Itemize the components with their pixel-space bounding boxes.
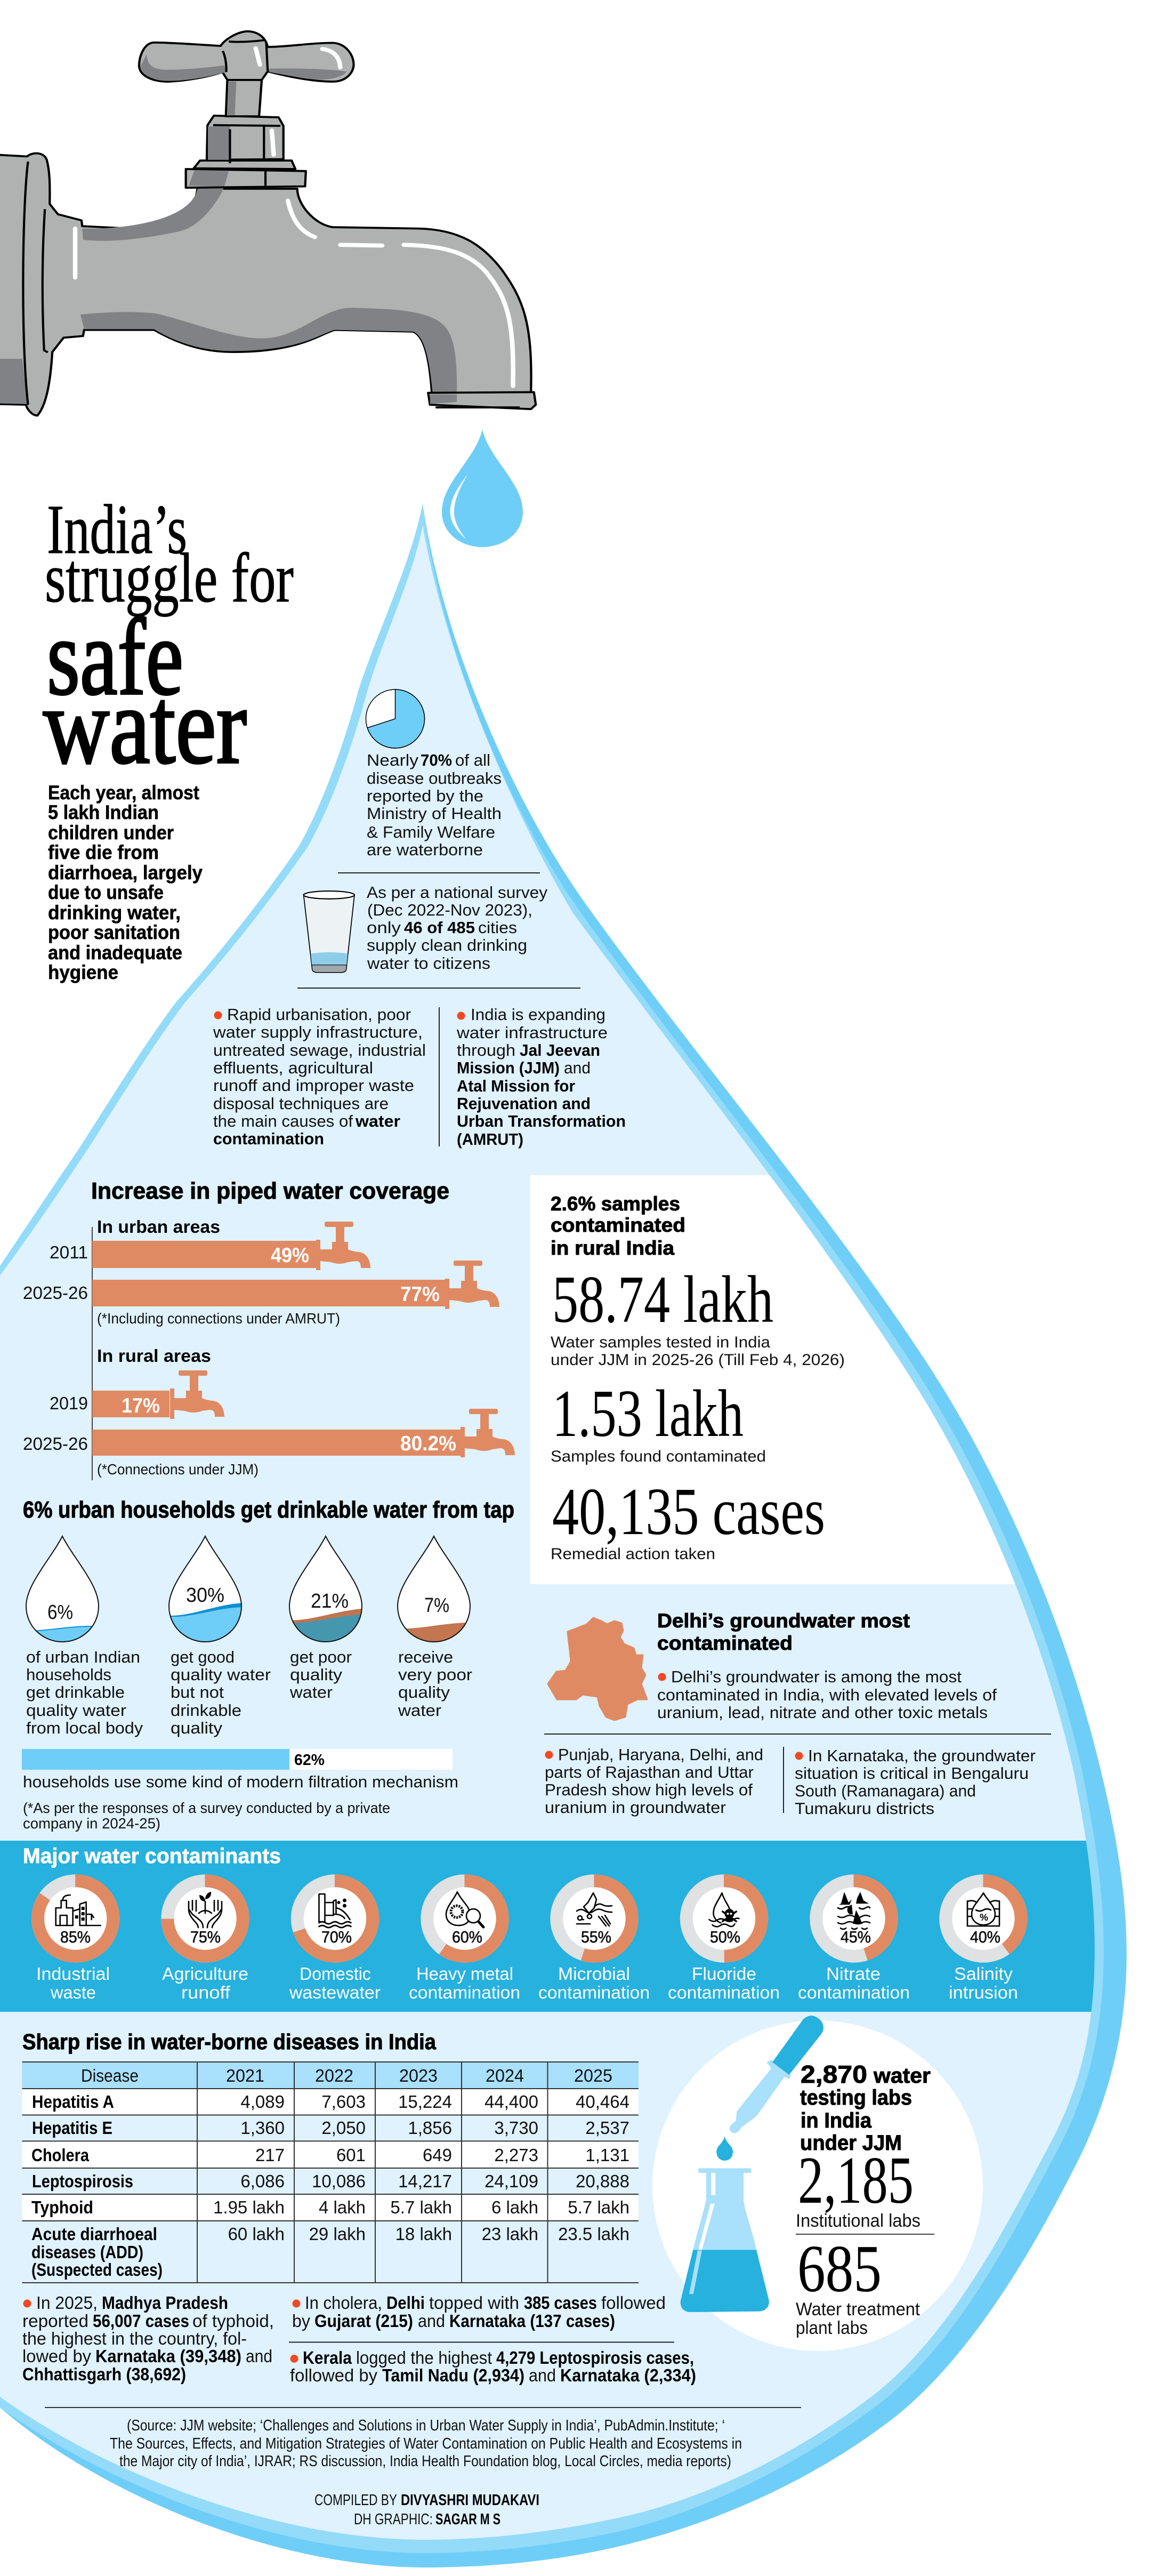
panel: water testing labs: 2,870 bbox=[801, 2060, 867, 2088]
panel: water testing labs: testing labs bbox=[800, 2086, 912, 2109]
table values: 6,086 bbox=[240, 2171, 285, 2191]
donut: nitrate contamination 45 percent bbox=[798, 1881, 910, 2002]
drop captions: get drinkable bbox=[26, 1683, 125, 1702]
text: infrastructure missions: and bbox=[564, 1058, 591, 1077]
panel: Delhi groundwater: Delhi’s groundwater is among the most bbox=[671, 1667, 962, 1686]
panel: Delhi groundwater: Delhi’s groundwater most bbox=[657, 1610, 910, 1632]
source note: (Source: JJM website; ‘Challenges and Solutions in Urban Water Supply in India’, PubAdmin.Institute; ‘ bbox=[127, 2417, 725, 2434]
bar: 62 percent filtration bbox=[22, 1749, 458, 1791]
drop captions: quality water bbox=[171, 1665, 271, 1684]
donut: heavy metal contamination 60 percent: 60% bbox=[452, 1928, 482, 1946]
text: infrastructure missions: water infrastructure bbox=[456, 1023, 608, 1042]
table row labels: Hepatitis A bbox=[32, 2092, 114, 2112]
drop captions: get poor bbox=[290, 1648, 352, 1666]
donut: nitrate contamination 45 percent: Nitrate bbox=[826, 1964, 881, 1984]
text: national survey: water to citizens bbox=[367, 954, 490, 973]
panel: rural samples contaminated: 58.74 lakh bbox=[552, 1263, 773, 1337]
table values: 5.7 lakh bbox=[390, 2197, 452, 2217]
table header: 2025 bbox=[574, 2066, 612, 2085]
table values: 217 bbox=[255, 2145, 285, 2165]
text: causes of contamination: disposal techniques are bbox=[213, 1094, 389, 1113]
panel: water testing labs: 2,185 bbox=[798, 2144, 914, 2218]
intro text block: due to unsafe bbox=[48, 881, 164, 903]
donut: microbial contamination 55 percent: Microbial bbox=[558, 1964, 630, 1984]
bar: urban 2025-26: 77% bbox=[400, 1283, 440, 1306]
panel: Delhi groundwater: Pradesh show high levels of bbox=[545, 1780, 753, 1799]
panel: rural samples contaminated: Water samples tested in India bbox=[551, 1334, 770, 1351]
donut: fluoride contamination 50 percent: Fluoride bbox=[692, 1964, 756, 1984]
text: disease outbreaks: disease outbreaks bbox=[367, 769, 502, 788]
table values: 6 lakh bbox=[491, 2197, 538, 2217]
text: cholera note: 385 cases bbox=[524, 2293, 597, 2313]
table values: 1,131 bbox=[585, 2145, 629, 2165]
panel: piped water coverage bbox=[23, 1178, 515, 1480]
credits: COMPILED BY bbox=[314, 2492, 397, 2509]
text: causes of contamination: Rapid urbanisation, poor bbox=[227, 1005, 411, 1024]
large water drop background bbox=[0, 504, 1127, 2567]
table values: 14,217 bbox=[398, 2171, 452, 2191]
title: India’s bbox=[47, 490, 187, 568]
panel: major water contaminants: Major water contaminants bbox=[23, 1844, 281, 1868]
table values: 2,273 bbox=[494, 2145, 538, 2165]
icon: water tap bbox=[0, 31, 536, 415]
bar: urban 2011: 49% bbox=[271, 1244, 309, 1267]
donut: agriculture runoff 75 percent bbox=[162, 1881, 248, 2002]
bar: urban 2011 bbox=[50, 1222, 370, 1270]
panel: Delhi groundwater: uranium, lead, nitrate and other toxic metals bbox=[657, 1703, 988, 1722]
text: causes of contamination: contamination bbox=[213, 1129, 324, 1148]
table values: 15,224 bbox=[398, 2092, 452, 2112]
bar: rural 2025-26 bbox=[23, 1409, 515, 1457]
panel: rural samples contaminated: Remedial action taken bbox=[551, 1545, 715, 1563]
table values: 2,537 bbox=[585, 2118, 629, 2138]
drop captions bbox=[26, 1648, 472, 1737]
table values: 60 lakh bbox=[228, 2224, 285, 2244]
donut: salinity intrusion 40 percent: intrusion bbox=[949, 1983, 1018, 2002]
donut: agriculture runoff 75 percent: runoff bbox=[181, 1983, 231, 2002]
donut: nitrate contamination 45 percent: contamination bbox=[798, 1983, 910, 2002]
icon: dropper and flask bbox=[681, 2016, 823, 2312]
table values: 40,464 bbox=[576, 2092, 629, 2112]
icon: glass of water bbox=[304, 891, 354, 973]
text: disease outbreaks bbox=[367, 751, 502, 859]
credits: SAGAR M S bbox=[435, 2511, 500, 2528]
drop captions: water bbox=[398, 1701, 441, 1720]
text: cholera note bbox=[292, 2293, 666, 2331]
drop captions: but not bbox=[171, 1683, 224, 1702]
footnote: survey bbox=[23, 1800, 390, 1832]
table values: 23.5 lakh bbox=[558, 2224, 629, 2244]
drop percentages: 7% bbox=[424, 1594, 449, 1617]
panel: Delhi groundwater: uranium in groundwater bbox=[545, 1798, 726, 1817]
intro text block: children under bbox=[48, 822, 174, 844]
drop percentages: 6% bbox=[47, 1601, 73, 1624]
intro text block: five die from bbox=[48, 841, 159, 863]
table row labels: Leptospirosis bbox=[32, 2171, 133, 2191]
text: national survey: only bbox=[367, 918, 401, 937]
panel: Delhi groundwater: Tumakuru districts bbox=[795, 1799, 934, 1818]
text: cholera note: followed bbox=[601, 2293, 666, 2313]
intro text block: drinking water, bbox=[48, 902, 181, 924]
credits: DH GRAPHIC: bbox=[354, 2511, 433, 2528]
source note: the Major city of India’, IJRAR; RS discussion, India Health Foundation blog, Local Circles, media reports) bbox=[119, 2453, 731, 2470]
text: disease outbreaks: 70% bbox=[421, 751, 452, 769]
donut: salinity intrusion 40 percent: 40% bbox=[970, 1928, 1000, 1946]
text: causes of contamination bbox=[213, 1005, 426, 1148]
panel: rural samples contaminated: Samples found contaminated bbox=[551, 1448, 766, 1465]
drop captions: water bbox=[289, 1683, 333, 1702]
text: disease outbreaks: Nearly bbox=[367, 751, 419, 769]
credits: DIVYASHRI MUDAKAVI bbox=[401, 2492, 539, 2509]
text: national survey: 46 of 485 bbox=[404, 918, 475, 937]
drop captions: quality bbox=[171, 1719, 223, 1737]
text: disease outbreaks: are waterborne bbox=[367, 840, 483, 859]
donut: domestic wastewater 70 percent: wastewater bbox=[289, 1983, 381, 2002]
text: infrastructure missions: Mission (JJM) bbox=[457, 1058, 560, 1077]
donut: salinity intrusion 40 percent: Salinity bbox=[954, 1964, 1013, 1984]
text: typhoid note: and bbox=[246, 2346, 272, 2366]
table row labels: Acute diarrhoeal bbox=[31, 2224, 157, 2244]
text: typhoid note: 56,007 cases bbox=[93, 2311, 189, 2331]
title bbox=[43, 490, 294, 787]
drop: 6 percent bbox=[20, 1536, 105, 1648]
panel: rural samples contaminated: contaminated bbox=[551, 1214, 685, 1236]
drop captions: get good bbox=[171, 1648, 235, 1666]
drop captions: receive bbox=[398, 1648, 453, 1666]
table values: 649 bbox=[423, 2145, 452, 2165]
text: causes of contamination: effluents, agricultural bbox=[213, 1058, 373, 1077]
panel: Delhi groundwater: In Karnataka, the groundwater bbox=[808, 1746, 1036, 1765]
table values: 1,856 bbox=[408, 2118, 452, 2138]
donut: heavy metal contamination 60 percent bbox=[409, 1881, 520, 2002]
panel: water testing labs: Water treatment bbox=[796, 2299, 920, 2320]
table values: 29 lakh bbox=[309, 2224, 366, 2244]
text: typhoid note: Madhya Pradesh bbox=[102, 2293, 228, 2313]
text: typhoid note: lowed by bbox=[22, 2346, 91, 2366]
donut: domestic wastewater 70 percent bbox=[289, 1881, 381, 2002]
donut: salinity intrusion 40 percent: % bbox=[980, 1912, 988, 1923]
icon: Delhi map bbox=[548, 1618, 647, 1720]
panel: Delhi groundwater: contaminated bbox=[657, 1632, 793, 1654]
source note: The Sources, Effects, and Mitigation Strategies of Water Contamination on Public Health and Ecosystems in bbox=[110, 2435, 742, 2452]
table header: 2023 bbox=[399, 2066, 438, 2085]
donut: nitrate contamination 45 percent: 45% bbox=[841, 1928, 871, 1946]
text: cholera note: by bbox=[292, 2311, 310, 2331]
title: safe bbox=[47, 597, 183, 718]
drop captions: quality bbox=[290, 1665, 343, 1684]
text: national survey: As per a national survey bbox=[367, 883, 548, 902]
text: disease outbreaks: of all bbox=[455, 751, 490, 769]
panel: major water contaminants bbox=[0, 1841, 1171, 2012]
drop captions: very poor bbox=[398, 1665, 472, 1684]
source note bbox=[110, 2417, 742, 2470]
text: leptospirosis note: and bbox=[529, 2365, 556, 2385]
drop percentages: 30% bbox=[186, 1584, 224, 1607]
text: infrastructure missions: through bbox=[457, 1041, 515, 1060]
table values: 2,050 bbox=[321, 2118, 366, 2138]
credits bbox=[314, 2492, 539, 2528]
text: cholera note: topped with bbox=[429, 2293, 519, 2313]
drop captions: drinkable bbox=[171, 1701, 241, 1720]
drop captions: of urban Indian bbox=[26, 1648, 140, 1666]
text: national survey: cities bbox=[478, 918, 517, 937]
table values: 1,360 bbox=[240, 2118, 285, 2138]
table values: 4,089 bbox=[240, 2092, 285, 2112]
table values: 3,730 bbox=[494, 2118, 538, 2138]
text: cholera note: and bbox=[418, 2311, 445, 2331]
table values: 44,400 bbox=[484, 2092, 538, 2112]
table values: 10,086 bbox=[312, 2171, 366, 2191]
donut: microbial contamination 55 percent: 55% bbox=[581, 1928, 611, 1946]
intro text block: and inadequate bbox=[48, 942, 182, 964]
text: causes of contamination: water bbox=[355, 1112, 400, 1130]
footnote: survey: company in 2024-25) bbox=[23, 1815, 160, 1832]
bar: rural 2025-26: 2025-26 bbox=[23, 1434, 88, 1454]
bar: rural 2019: 2019 bbox=[50, 1393, 88, 1413]
heading: water-borne diseases: Sharp rise in water-borne diseases in India bbox=[22, 2029, 437, 2054]
donut: domestic wastewater 70 percent: 70% bbox=[321, 1928, 352, 1946]
table values: 1.95 lakh bbox=[213, 2197, 285, 2217]
panel: water testing labs: under JJM bbox=[800, 2131, 902, 2155]
text: leptospirosis note: Karnataka (2,334) bbox=[560, 2365, 696, 2385]
text: typhoid note: the highest in the country, fol- bbox=[22, 2329, 247, 2348]
text: cholera note: Karnataka (137 cases) bbox=[449, 2311, 615, 2331]
table header bbox=[81, 2066, 612, 2085]
drop: 21 percent bbox=[283, 1536, 368, 1648]
text: leptospirosis note: Tamil Nadu (2,934) bbox=[382, 2365, 524, 2385]
text: national survey: (Dec 2022-Nov 2023), bbox=[367, 901, 532, 919]
text: infrastructure missions: Urban Transformation bbox=[457, 1112, 626, 1130]
panel: water testing labs bbox=[652, 2016, 983, 2351]
panel: Delhi groundwater: Punjab, Haryana, Delhi, and bbox=[558, 1745, 763, 1764]
table row labels: Cholera bbox=[31, 2145, 90, 2165]
table header: 2021 bbox=[226, 2066, 264, 2085]
donut: fluoride contamination 50 percent: contamination bbox=[668, 1983, 780, 2002]
table values: 601 bbox=[336, 2145, 366, 2165]
text: leptospirosis note bbox=[290, 2348, 696, 2385]
table values: 5.7 lakh bbox=[568, 2197, 629, 2217]
table values: 24,109 bbox=[484, 2171, 538, 2191]
table row labels: (Suspected cases) bbox=[31, 2260, 163, 2280]
panel: rural samples contaminated: under JJM in 2025-26 (Till Feb 4, 2026) bbox=[551, 1351, 845, 1369]
panel: water testing labs: Institutional labs bbox=[796, 2211, 920, 2231]
text: infrastructure missions: (AMRUT) bbox=[457, 1130, 523, 1149]
table row labels: Hepatitis E bbox=[32, 2118, 112, 2138]
icon: falling water drop bbox=[442, 429, 523, 547]
table row labels: diseases (ADD) bbox=[31, 2242, 143, 2262]
donut: agriculture runoff 75 percent: Agriculture bbox=[162, 1964, 248, 1984]
text: causes of contamination: runoff and improper waste bbox=[213, 1076, 414, 1095]
panel: Delhi groundwater: situation is critical in Bengaluru bbox=[795, 1764, 1029, 1783]
text: typhoid note: reported bbox=[22, 2311, 88, 2331]
panel: Delhi groundwater: contaminated in India, with elevated levels of bbox=[657, 1686, 997, 1704]
table: water-borne diseases bbox=[22, 2062, 639, 2283]
intro text block: Each year, almost bbox=[48, 782, 199, 804]
panel: urban households drinkable water: 6% urban households get drinkable water from tap bbox=[23, 1497, 514, 1523]
table row labels: Typhoid bbox=[31, 2197, 93, 2217]
donut: microbial contamination 55 percent: contamination bbox=[538, 1983, 650, 2002]
panel: urban households drinkable water bbox=[20, 1497, 514, 1832]
text: infrastructure missions bbox=[456, 1005, 626, 1149]
text: cholera note: Delhi bbox=[386, 2293, 425, 2313]
donut: microbial contamination 55 percent bbox=[538, 1881, 650, 2002]
table values: 23 lakh bbox=[482, 2224, 538, 2244]
table values: 20,888 bbox=[576, 2171, 629, 2191]
bar: urban 2025-26 bbox=[23, 1261, 499, 1309]
panel: rural samples contaminated: in rural India bbox=[551, 1237, 674, 1259]
panel: rural samples contaminated: 2.6% samples bbox=[551, 1193, 680, 1215]
text: infrastructure missions: India is expanding bbox=[471, 1005, 605, 1024]
panel: piped water coverage: In rural areas bbox=[97, 1346, 211, 1366]
panel: water testing labs: in India bbox=[801, 2109, 872, 2132]
text: national survey: supply clean drinking bbox=[367, 936, 527, 954]
bar: 62 percent filtration: 62% bbox=[294, 1752, 325, 1769]
panel: piped water coverage: In urban areas bbox=[97, 1217, 220, 1237]
text: national survey bbox=[367, 883, 548, 973]
drop percentages: 21% bbox=[311, 1590, 349, 1612]
drop captions: quality water bbox=[26, 1701, 126, 1720]
panel: rural samples contaminated bbox=[530, 1175, 1171, 1584]
panel: Delhi groundwater: South (Ramanagara) and bbox=[795, 1781, 976, 1800]
text: leptospirosis note: Kerala bbox=[303, 2348, 352, 2368]
donut: industrial waste 85 percent: Industrial bbox=[36, 1964, 110, 1984]
table values: 18 lakh bbox=[395, 2224, 452, 2244]
text: leptospirosis note: logged the highest bbox=[356, 2348, 492, 2368]
panel: piped water coverage: (*Connections under JJM) bbox=[97, 1461, 259, 1478]
text: leptospirosis note: 4,279 Leptospirosis cases, bbox=[496, 2348, 694, 2368]
text: infrastructure missions: Rejuvenation and bbox=[457, 1094, 591, 1113]
bar: rural 2025-26: 80.2% bbox=[400, 1432, 456, 1455]
text: typhoid note: Karnataka (39,348) bbox=[95, 2346, 241, 2366]
panel: piped water coverage: Increase in piped water coverage bbox=[91, 1178, 449, 1204]
text: causes of contamination: untreated sewage, industrial bbox=[213, 1041, 426, 1060]
bar: 62 percent filtration: households use some kind of modern filtration mechanism bbox=[23, 1772, 458, 1791]
text: leptospirosis note: followed by bbox=[290, 2365, 377, 2385]
donut: heavy metal contamination 60 percent: contamination bbox=[409, 1983, 520, 2002]
title: struggle for bbox=[45, 539, 294, 617]
text: disease outbreaks: Ministry of Health bbox=[367, 804, 502, 823]
text: typhoid note: In 2025, bbox=[36, 2293, 98, 2313]
table header: Disease bbox=[81, 2066, 139, 2085]
bar: urban 2011: 2011 bbox=[50, 1242, 88, 1262]
donut: salinity intrusion 40 percent bbox=[946, 1881, 1021, 2002]
panel: rural samples contaminated: 1.53 lakh bbox=[552, 1377, 744, 1451]
donut: heavy metal contamination 60 percent: Heavy metal bbox=[416, 1964, 513, 1984]
drop captions: households bbox=[26, 1665, 111, 1684]
panel: Delhi groundwater bbox=[544, 1610, 1051, 1818]
drop: 7 percent bbox=[391, 1536, 477, 1648]
intro text block: 5 lakh Indian bbox=[48, 801, 159, 823]
panel: water testing labs: water bbox=[873, 2064, 931, 2088]
panel: water testing labs: plant labs bbox=[796, 2318, 868, 2338]
text: infrastructure missions: Jal Jeevan bbox=[520, 1041, 600, 1060]
panel: rural samples contaminated: 40,135 cases bbox=[552, 1475, 825, 1549]
drop captions: quality bbox=[398, 1683, 450, 1702]
text: causes of contamination: water supply infrastructure, bbox=[213, 1023, 423, 1041]
intro text block: hygiene bbox=[48, 961, 118, 983]
text: cholera note: In cholera, bbox=[305, 2293, 382, 2313]
donut: industrial waste 85 percent bbox=[36, 1881, 113, 2002]
donut: fluoride contamination 50 percent bbox=[668, 1881, 780, 2002]
donut: industrial waste 85 percent: 85% bbox=[60, 1928, 91, 1946]
drop: 30 percent bbox=[163, 1536, 248, 1648]
bar: urban 2025-26: 2025-26 bbox=[23, 1283, 88, 1303]
title: water bbox=[43, 665, 247, 787]
table values: 4 lakh bbox=[319, 2197, 366, 2217]
text: cholera note: Gujarat (215) bbox=[314, 2311, 413, 2331]
donut: industrial waste 85 percent: waste bbox=[50, 1983, 96, 2002]
table header: 2024 bbox=[486, 2066, 524, 2085]
text: typhoid note: Chhattisgarh (38,692) bbox=[22, 2364, 186, 2384]
text: typhoid note bbox=[22, 2293, 274, 2384]
drop captions: from local body bbox=[26, 1719, 143, 1737]
donut: fluoride contamination 50 percent: 50% bbox=[710, 1928, 740, 1946]
text: disease outbreaks: reported by the bbox=[367, 787, 483, 805]
text: disease outbreaks: & Family Welfare bbox=[367, 823, 495, 841]
drop percentages bbox=[47, 1584, 449, 1624]
intro text block bbox=[48, 782, 203, 983]
panel: water testing labs: 685 bbox=[797, 2232, 882, 2306]
table values: 7,603 bbox=[321, 2092, 366, 2112]
table row labels bbox=[31, 2092, 163, 2280]
bar: rural 2019 bbox=[50, 1370, 224, 1419]
panel: piped water coverage: (*Including connections under AMRUT) bbox=[97, 1310, 340, 1327]
text: causes of contamination: the main causes of bbox=[213, 1112, 353, 1130]
donut: agriculture runoff 75 percent: 75% bbox=[190, 1928, 221, 1946]
table header: 2022 bbox=[315, 2066, 353, 2085]
text: infrastructure missions: Atal Mission for bbox=[457, 1077, 575, 1095]
panel: Delhi groundwater: parts of Rajasthan and Uttar bbox=[545, 1763, 754, 1781]
footnote: survey: (*As per the responses of a survey conducted by a private bbox=[23, 1800, 390, 1816]
table values bbox=[213, 2092, 629, 2244]
pie chart: 70 percent waterborne bbox=[366, 689, 425, 748]
intro text block: diarrhoea, largely bbox=[48, 862, 203, 884]
text: typhoid note: of typhoid, bbox=[192, 2311, 274, 2331]
donut: domestic wastewater 70 percent: Domestic bbox=[300, 1964, 371, 1984]
intro text block: poor sanitation bbox=[48, 921, 180, 943]
bar: rural 2019: 17% bbox=[122, 1394, 160, 1417]
